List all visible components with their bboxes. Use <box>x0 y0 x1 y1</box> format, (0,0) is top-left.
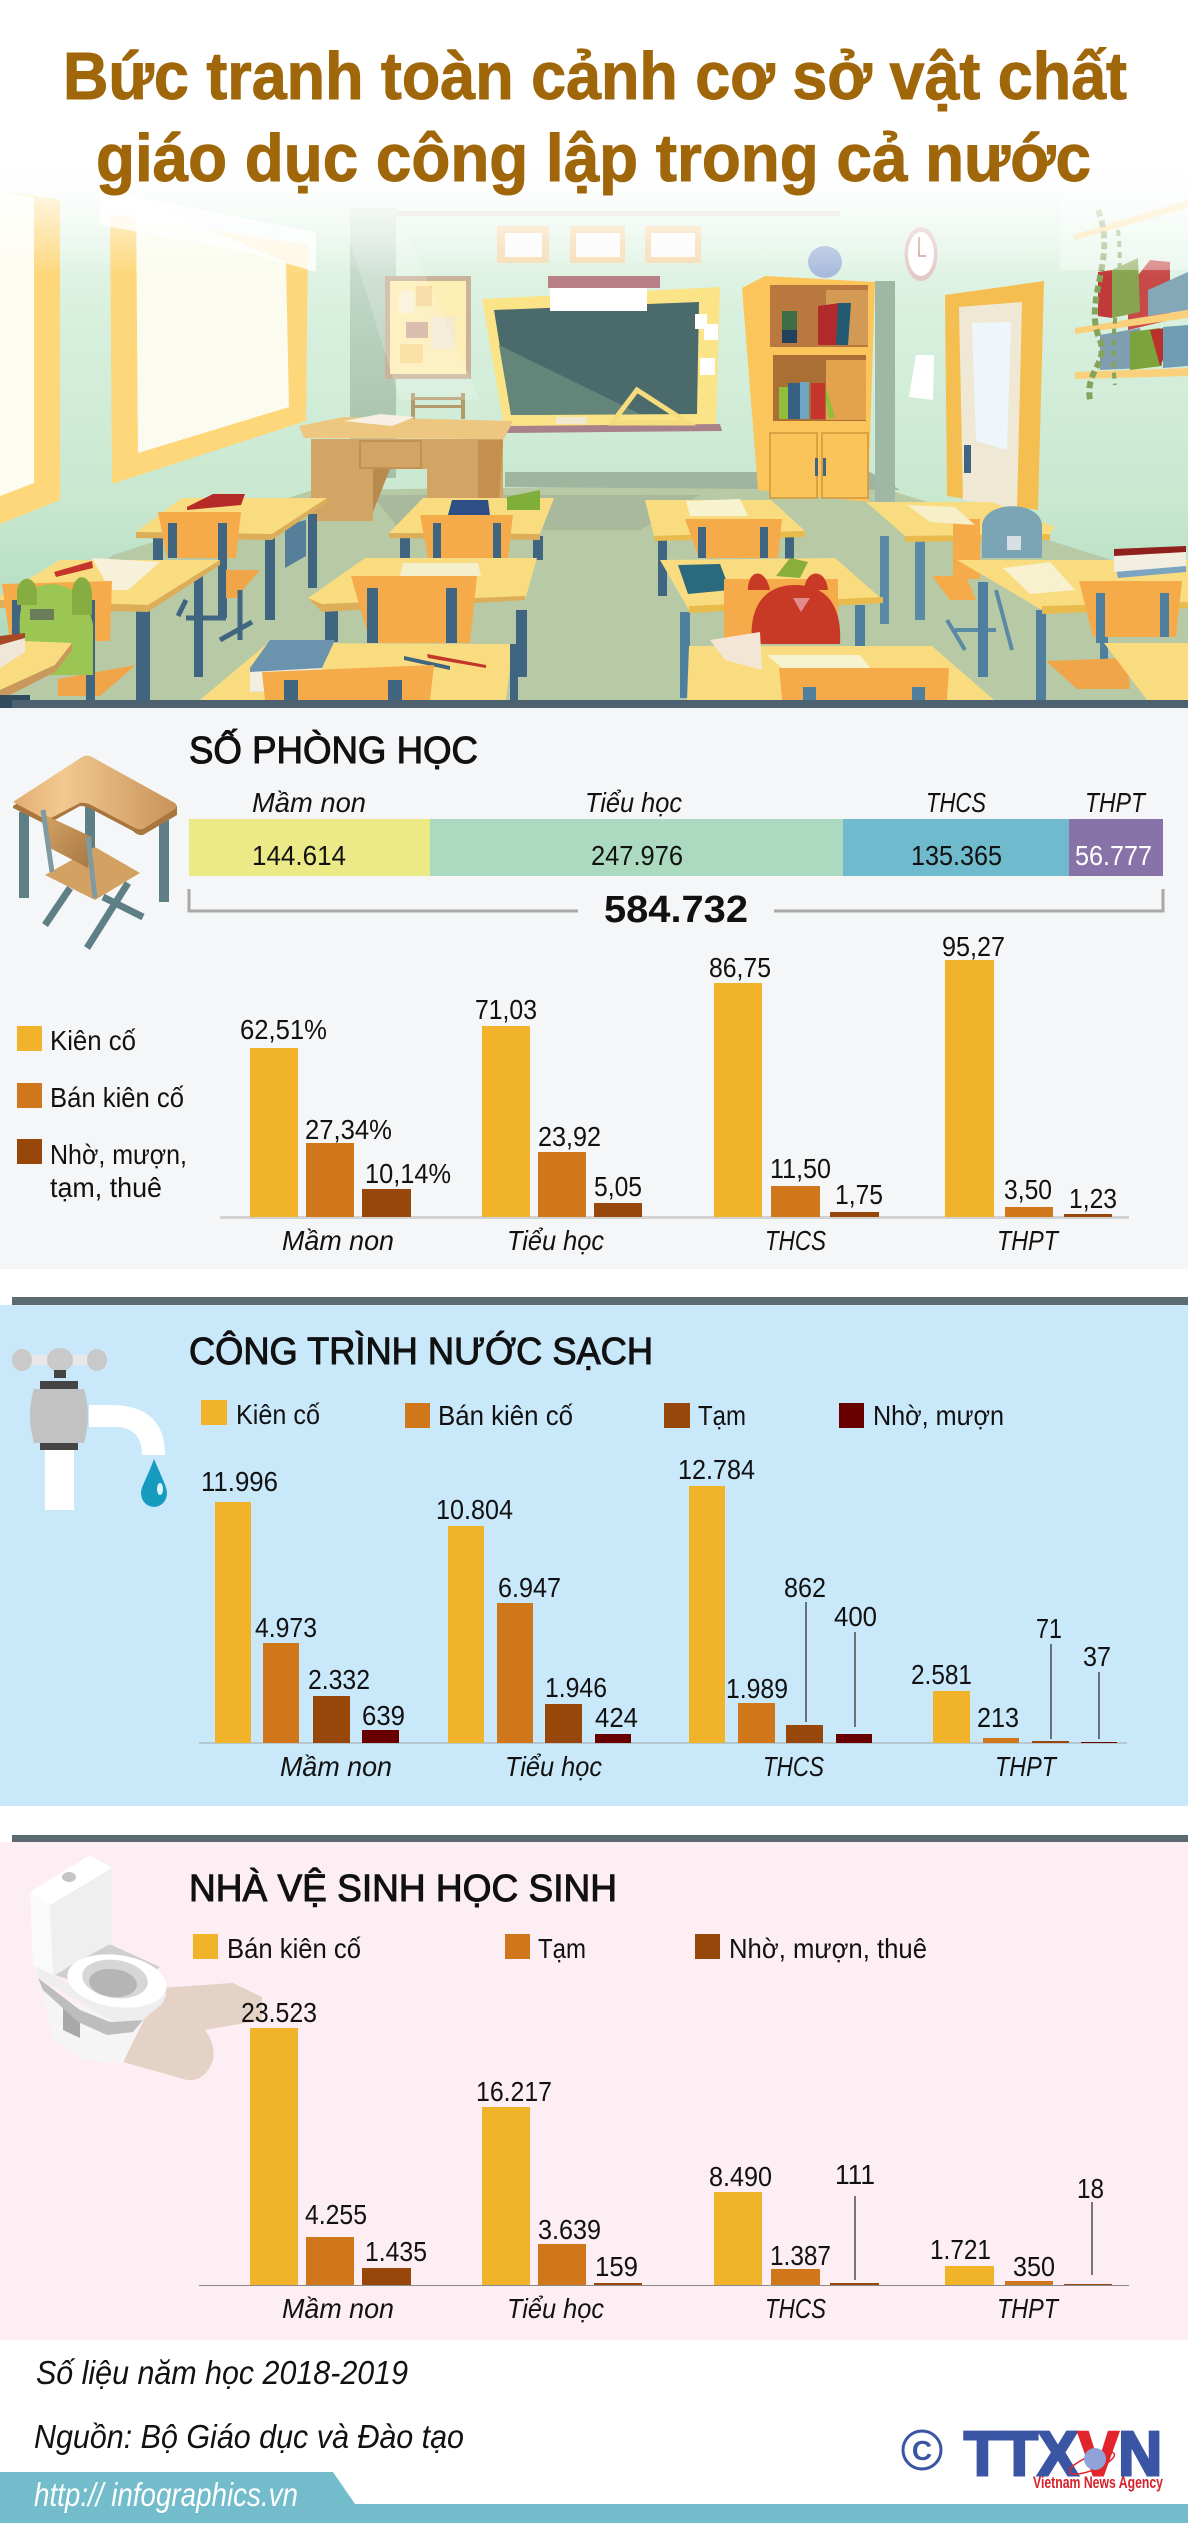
bar chart: water works: 213 <box>977 1702 1019 1733</box>
floor <box>0 484 1188 708</box>
total bracket: 584.732 <box>604 889 748 931</box>
heading: NHÀ VỆ SINH HỌC SINH <box>189 1867 617 1910</box>
bar chart: toilets: 8.490 <box>709 2161 772 2192</box>
bar chart: water works: 1.989 <box>726 1673 788 1704</box>
bar chart: water works: Mầm non <box>280 1751 392 1782</box>
icon: toilet with shadow <box>30 1855 262 2080</box>
stacked total bar: THCS <box>926 787 986 818</box>
bar chart: toilets: THCS <box>765 2293 826 2324</box>
legend: Bán kiên cố <box>50 1082 184 1113</box>
icon: middle window <box>100 190 316 484</box>
hero bottom bar <box>12 700 1188 708</box>
legend: tạm, thuê <box>50 1172 162 1203</box>
icon: fade top <box>0 150 1188 275</box>
bar chart: water works: THCS <box>763 1751 824 1782</box>
bar chart: room types: 71,03 <box>475 994 537 1025</box>
bar chart: water works: 12.784 <box>678 1454 755 1485</box>
bar chart: room types: 1,23 <box>1069 1183 1117 1214</box>
panel: số phòng học <box>0 708 1188 1269</box>
icon: cabinet <box>742 276 895 502</box>
stacked total bar <box>189 787 1163 876</box>
bar chart: water works: 862 <box>784 1572 826 1603</box>
bar chart: water works: 37 <box>1083 1641 1111 1672</box>
stacked total bar: THPT <box>1085 787 1147 818</box>
desk front row J <box>200 640 518 700</box>
legend: Nhờ, mượn, thuê <box>729 1933 927 1964</box>
bar chart: toilets: 23.523 <box>241 1997 317 2028</box>
title <box>63 39 1127 196</box>
logo: copyright TTXVN: TTXVN <box>964 2420 1162 2489</box>
desk back row B <box>389 490 554 560</box>
bar chart: room types: 23,92 <box>538 1121 601 1152</box>
desk back row C <box>645 499 805 596</box>
bar chart: water works: 1.946 <box>545 1672 607 1703</box>
desk back row A <box>136 494 327 640</box>
bar chart: water works: 6.947 <box>498 1572 561 1603</box>
icon: note paper <box>909 355 934 400</box>
bar chart: water works: 4.973 <box>255 1612 317 1643</box>
bar chart: room types: Tiểu học <box>507 1225 604 1256</box>
stacked total bar: Tiểu học <box>585 787 682 818</box>
bar chart: toilets: THPT <box>997 2293 1060 2324</box>
stacked total bar: 144.614 <box>252 840 346 871</box>
bar chart: water works: 424 <box>595 1702 638 1733</box>
panel: hero classroom illustration <box>0 150 1188 708</box>
icon: door <box>945 281 1044 510</box>
bar chart: water works: 639 <box>362 1700 405 1731</box>
bar chart: room types: Mầm non <box>282 1225 394 1256</box>
bar chart: room types: 27,34% <box>305 1114 392 1145</box>
stacked total bar: 135.365 <box>911 840 1002 871</box>
total bracket <box>189 889 1163 931</box>
footer band with url <box>0 2472 1188 2523</box>
desk front row L <box>1104 643 1188 700</box>
right corner fade <box>1060 180 1188 270</box>
bar chart: toilets: 16.217 <box>476 2076 552 2107</box>
stacked total bar: 247.976 <box>591 840 683 871</box>
icon: clock <box>904 227 938 281</box>
icon: left window <box>0 190 60 524</box>
bar chart: room types: 3,50 <box>1004 1174 1052 1205</box>
icon: school desk and chair <box>13 756 177 948</box>
footer note: source: Nguồn: Bộ Giáo dục và Đào tạo <box>34 2418 464 2455</box>
desk front row K <box>687 632 994 700</box>
bar chart: toilets: 1.721 <box>930 2234 991 2265</box>
bar chart: toilets: 159 <box>595 2251 638 2282</box>
bar chart: toilets: 4.255 <box>305 2199 367 2230</box>
legend: Nhờ, mượn, <box>50 1139 187 1170</box>
bar chart: room types: 10,14% <box>365 1158 451 1189</box>
bar chart: toilets: Tiểu học <box>507 2293 604 2324</box>
footer band with url: http:// infographics.vn <box>34 2476 298 2513</box>
bar chart: room types: THCS <box>765 1225 826 1256</box>
bar chart: water works: Tiểu học <box>505 1751 602 1782</box>
title: giáo dục công lập trong cả nước <box>96 121 1091 196</box>
heading: CÔNG TRÌNH NƯỚC SẠCH <box>189 1329 653 1373</box>
panel: công trình nước sạch <box>0 1305 1188 1806</box>
legend: Tạm <box>538 1933 586 1964</box>
legend: Nhờ, mượn <box>873 1400 1004 1431</box>
bar chart: toilets: 18 <box>1077 2173 1104 2204</box>
bar chart: toilets: 111 <box>835 2159 875 2190</box>
title: Bức tranh toàn cảnh cơ sở vật chất <box>63 39 1127 114</box>
icon: bulletin board <box>385 276 471 379</box>
icon: teacher desk <box>299 414 513 521</box>
bar chart: room types: 86,75 <box>709 952 771 983</box>
legend <box>17 1025 187 1203</box>
legend <box>193 1933 927 1964</box>
bar chart: room types <box>220 931 1129 1256</box>
legend: Kiên cố <box>50 1025 136 1056</box>
desk middle row G with red backpack <box>660 558 883 698</box>
bar chart: water works: 10.804 <box>436 1494 513 1525</box>
bar chart: room types: 62,51% <box>240 1014 327 1045</box>
legend: Bán kiên cố <box>438 1400 573 1431</box>
section divider bar <box>12 1297 1188 1305</box>
bar chart: toilets: 1.435 <box>365 2236 427 2267</box>
bar chart: room types: 1,75 <box>835 1179 883 1210</box>
bar chart: room types: 95,27 <box>942 931 1005 962</box>
bar chart: water works: THPT <box>995 1751 1058 1782</box>
legend <box>201 1399 1004 1431</box>
icon: teacher chair <box>411 393 465 419</box>
legend: Kiên cố <box>236 1399 320 1430</box>
desk back row D with backpack <box>866 502 1055 650</box>
bar chart: water works <box>199 1454 1127 1782</box>
desk middle row F <box>308 558 537 677</box>
bar chart: water works: 400 <box>834 1601 877 1632</box>
bar chart: toilets: 350 <box>1013 2251 1055 2282</box>
heading: SỐ PHÒNG HỌC <box>189 727 478 772</box>
bar chart: toilets <box>199 1997 1129 2324</box>
bar chart: room types: 11,50 <box>770 1153 831 1184</box>
icon: picture frames <box>497 226 701 263</box>
icon: water faucet <box>12 1348 167 1510</box>
bar chart: toilets: Mầm non <box>282 2293 394 2324</box>
stacked total bar: Mầm non <box>252 787 366 818</box>
desk middle row H <box>957 546 1188 700</box>
light beam over left wall <box>340 210 480 400</box>
bar chart: toilets: 1.387 <box>770 2240 831 2271</box>
legend: Bán kiên cố <box>227 1933 361 1964</box>
bar chart: water works: 11.996 <box>201 1466 278 1497</box>
stacked total bar: 56.777 <box>1075 840 1152 871</box>
icon: chalkboard <box>482 276 722 433</box>
bar chart: room types: 5,05 <box>594 1171 642 1202</box>
section divider bar <box>12 1835 1188 1842</box>
column <box>350 208 396 478</box>
bar chart: room types: THPT <box>997 1225 1060 1256</box>
desk middle row E with green backpack <box>0 558 220 700</box>
bar chart: water works: 2.332 <box>308 1664 370 1695</box>
bar chart: water works: 71 <box>1036 1613 1062 1644</box>
bar chart: toilets: 3.639 <box>538 2214 601 2245</box>
icon: globe <box>808 246 842 278</box>
legend: Tạm <box>698 1400 746 1431</box>
icon: wall shelves with books and plant <box>1073 200 1188 400</box>
desk front row left <box>0 633 72 708</box>
footer note: school year: Số liệu năm học 2018-2019 <box>36 2354 408 2391</box>
bar chart: water works: 2.581 <box>911 1659 972 1690</box>
panel: nhà vệ sinh học sinh <box>0 1842 1188 2340</box>
logo: copyright TTXVN: C <box>912 2435 932 2466</box>
